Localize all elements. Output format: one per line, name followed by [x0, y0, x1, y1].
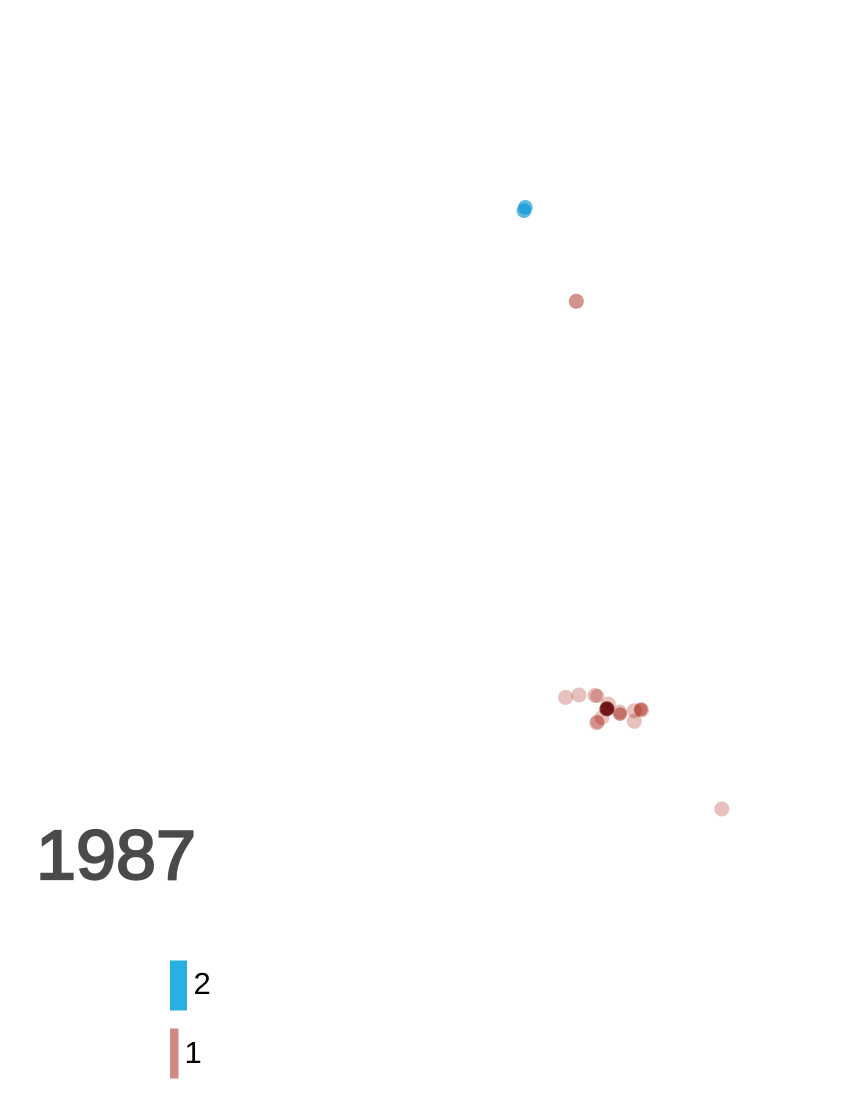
- legend item: 2: 2: [194, 966, 211, 1001]
- legend: [170, 960, 211, 1078]
- legend item: 1: 1: [184, 1035, 202, 1070]
- red dots main cluster: [558, 688, 649, 730]
- red dot upper: [569, 294, 584, 309]
- blue dots cluster: [517, 200, 533, 218]
- year label: 1987: [36, 816, 196, 894]
- red dot lower right: [714, 802, 729, 816]
